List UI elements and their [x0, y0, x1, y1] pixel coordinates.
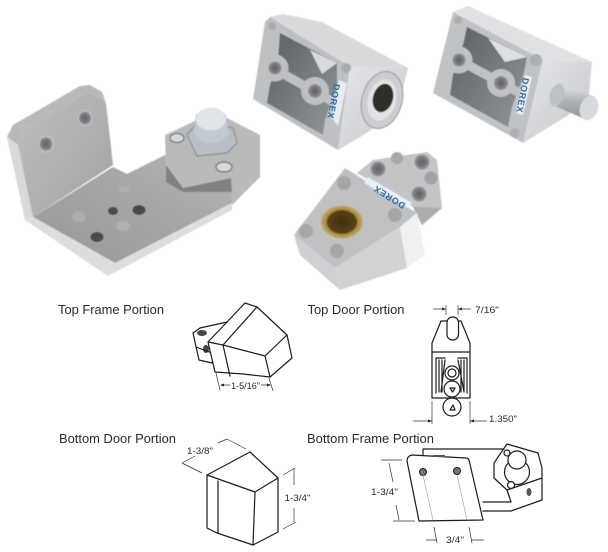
heading: Top Door Portion: Top Door Portion — [308, 302, 404, 317]
label: upside-down DOREX on bottom door block: DOREX — [372, 183, 407, 211]
dimension: 1-3/4 door: 1-3/4" — [284, 493, 310, 504]
heading: Top Frame Portion: Top Frame Portion — [58, 302, 164, 317]
heading: Bottom Frame Portion: Bottom Frame Portion — [307, 431, 434, 446]
heading: Bottom Door Portion: Bottom Door Portion — [59, 431, 176, 446]
diagram: top frame portion — [193, 303, 292, 392]
dimension: 7/16: 7/16" — [475, 305, 499, 316]
diagram: top door portion — [413, 305, 499, 424]
dimension: 1-3/8: 1-3/8" — [187, 446, 213, 457]
dimension: 1-5/16: 1-5/16" — [231, 381, 260, 392]
dimension: 1-3/4 frame: 1-3/4" — [371, 487, 398, 498]
dimension: 1.350: 1.350" — [489, 414, 517, 425]
photo: bottom door block with bronze bushing — [294, 152, 442, 290]
photo: bottom frame bracket — [7, 85, 260, 276]
dimension: 3/4: 3/4" — [446, 535, 464, 546]
diagram: bottom frame portion — [371, 444, 542, 546]
photo: top door block with pin — [433, 6, 601, 143]
photo: top frame block with bore — [253, 14, 409, 150]
label: DOREX on top frame block: DOREX — [325, 83, 342, 120]
diagram: bottom door portion — [182, 439, 310, 545]
label: DOREX on top door block: DOREX — [514, 77, 531, 114]
